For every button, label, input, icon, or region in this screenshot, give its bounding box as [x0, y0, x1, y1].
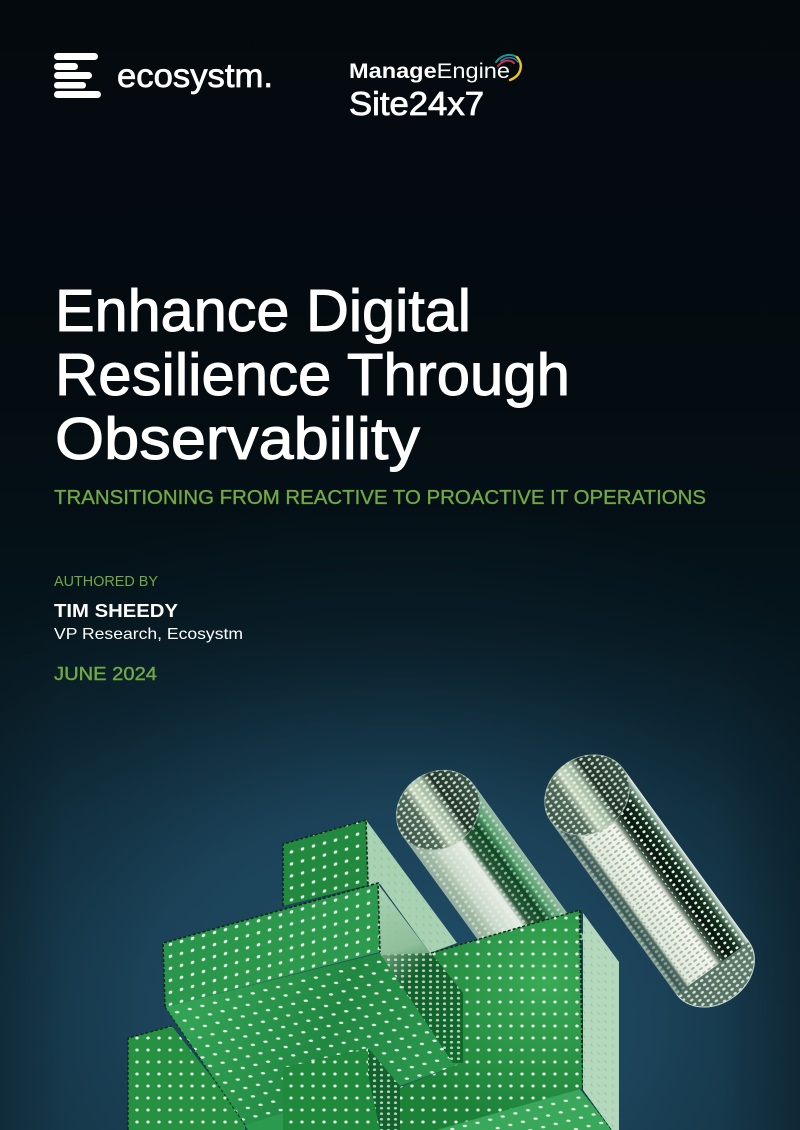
- title: Observability: [55, 406, 421, 472]
- block: bottom centre face: [283, 1048, 400, 1130]
- block: lower left face: [128, 1026, 245, 1130]
- icon: ManageEngine arcs: [496, 55, 521, 80]
- block: main upper face: [163, 883, 380, 1007]
- block: small lower step: [245, 1113, 283, 1130]
- subtitle: TRANSITIONING FROM REACTIVE TO PROACTIVE IT OPERATIONS: [54, 486, 706, 509]
- block: right large face: [400, 910, 583, 1130]
- illustration: perforated green blocks and glass cylinders: [128, 738, 770, 1130]
- authored by label: AUTHORED BY: [54, 574, 158, 590]
- title: Resilience Through: [55, 342, 570, 408]
- icon: ecosystm stacked bars: [54, 53, 101, 98]
- glass cylinder: right: [544, 754, 755, 1008]
- wordmark: Site24x7: Site24x7: [349, 85, 484, 122]
- block: rear upper face: [283, 820, 368, 906]
- author block: [54, 574, 243, 643]
- author role: VP Research, Ecosystm: [54, 626, 243, 643]
- block: dark recess: [381, 953, 463, 1063]
- block: inner pale side: [378, 884, 430, 955]
- wordmark: ManageEngine: Manage Engine: [349, 59, 510, 83]
- wordmark: ecosystm: ecosystm.: [117, 57, 273, 94]
- author name: TIM SHEEDY: [54, 600, 179, 621]
- date: JUNE 2024: [54, 664, 157, 684]
- block: right light side: [583, 913, 619, 1130]
- glass cylinder: left: [396, 770, 583, 940]
- title: Enhance Digital: [55, 278, 471, 344]
- title: [55, 278, 570, 472]
- logo: ecosystm: [54, 53, 273, 98]
- block: rear light side: [366, 820, 457, 953]
- logo: ManageEngine Site24x7: [349, 55, 521, 122]
- block: sloped face: [165, 953, 463, 1125]
- block: bottom right slope: [437, 1089, 612, 1130]
